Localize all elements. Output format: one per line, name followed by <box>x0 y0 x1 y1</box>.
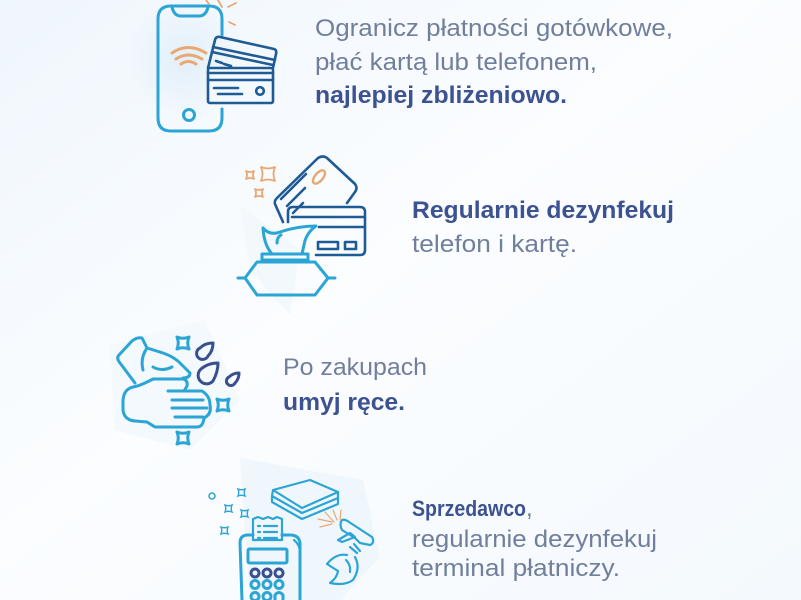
text: advice for sellers <box>412 495 657 582</box>
text: advice for sellers: terminal płatniczy. <box>412 555 620 582</box>
text: contactless payment advice: Ogranicz płatności gotówkowe, <box>315 15 673 42</box>
icon: phone with contactless cards <box>158 0 276 131</box>
text: contactless payment advice: najlepiej zbliżeniowo. <box>315 82 567 109</box>
icon: washing hands <box>118 337 239 444</box>
text: disinfect phone and card: Regularnie dezynfekuj <box>412 197 674 224</box>
text: contactless payment advice: płać kartą lub telefonem, <box>315 49 597 76</box>
text: wash hands: umyj ręce. <box>283 389 405 416</box>
text: contactless payment advice <box>315 15 673 109</box>
text: advice for sellers: regularnie dezynfekuj <box>412 526 657 553</box>
icon: cards and wipes <box>238 156 365 295</box>
text: advice for sellers: Sprzedawco <box>412 496 526 521</box>
text: wash hands <box>283 354 427 416</box>
icon: payment terminal, wipes and spray <box>209 480 373 600</box>
text: disinfect phone and card <box>412 197 674 258</box>
text: disinfect phone and card: telefon i kartę. <box>412 231 577 258</box>
text: advice for sellers: , <box>526 495 533 522</box>
text: wash hands: Po zakupach <box>283 354 427 381</box>
